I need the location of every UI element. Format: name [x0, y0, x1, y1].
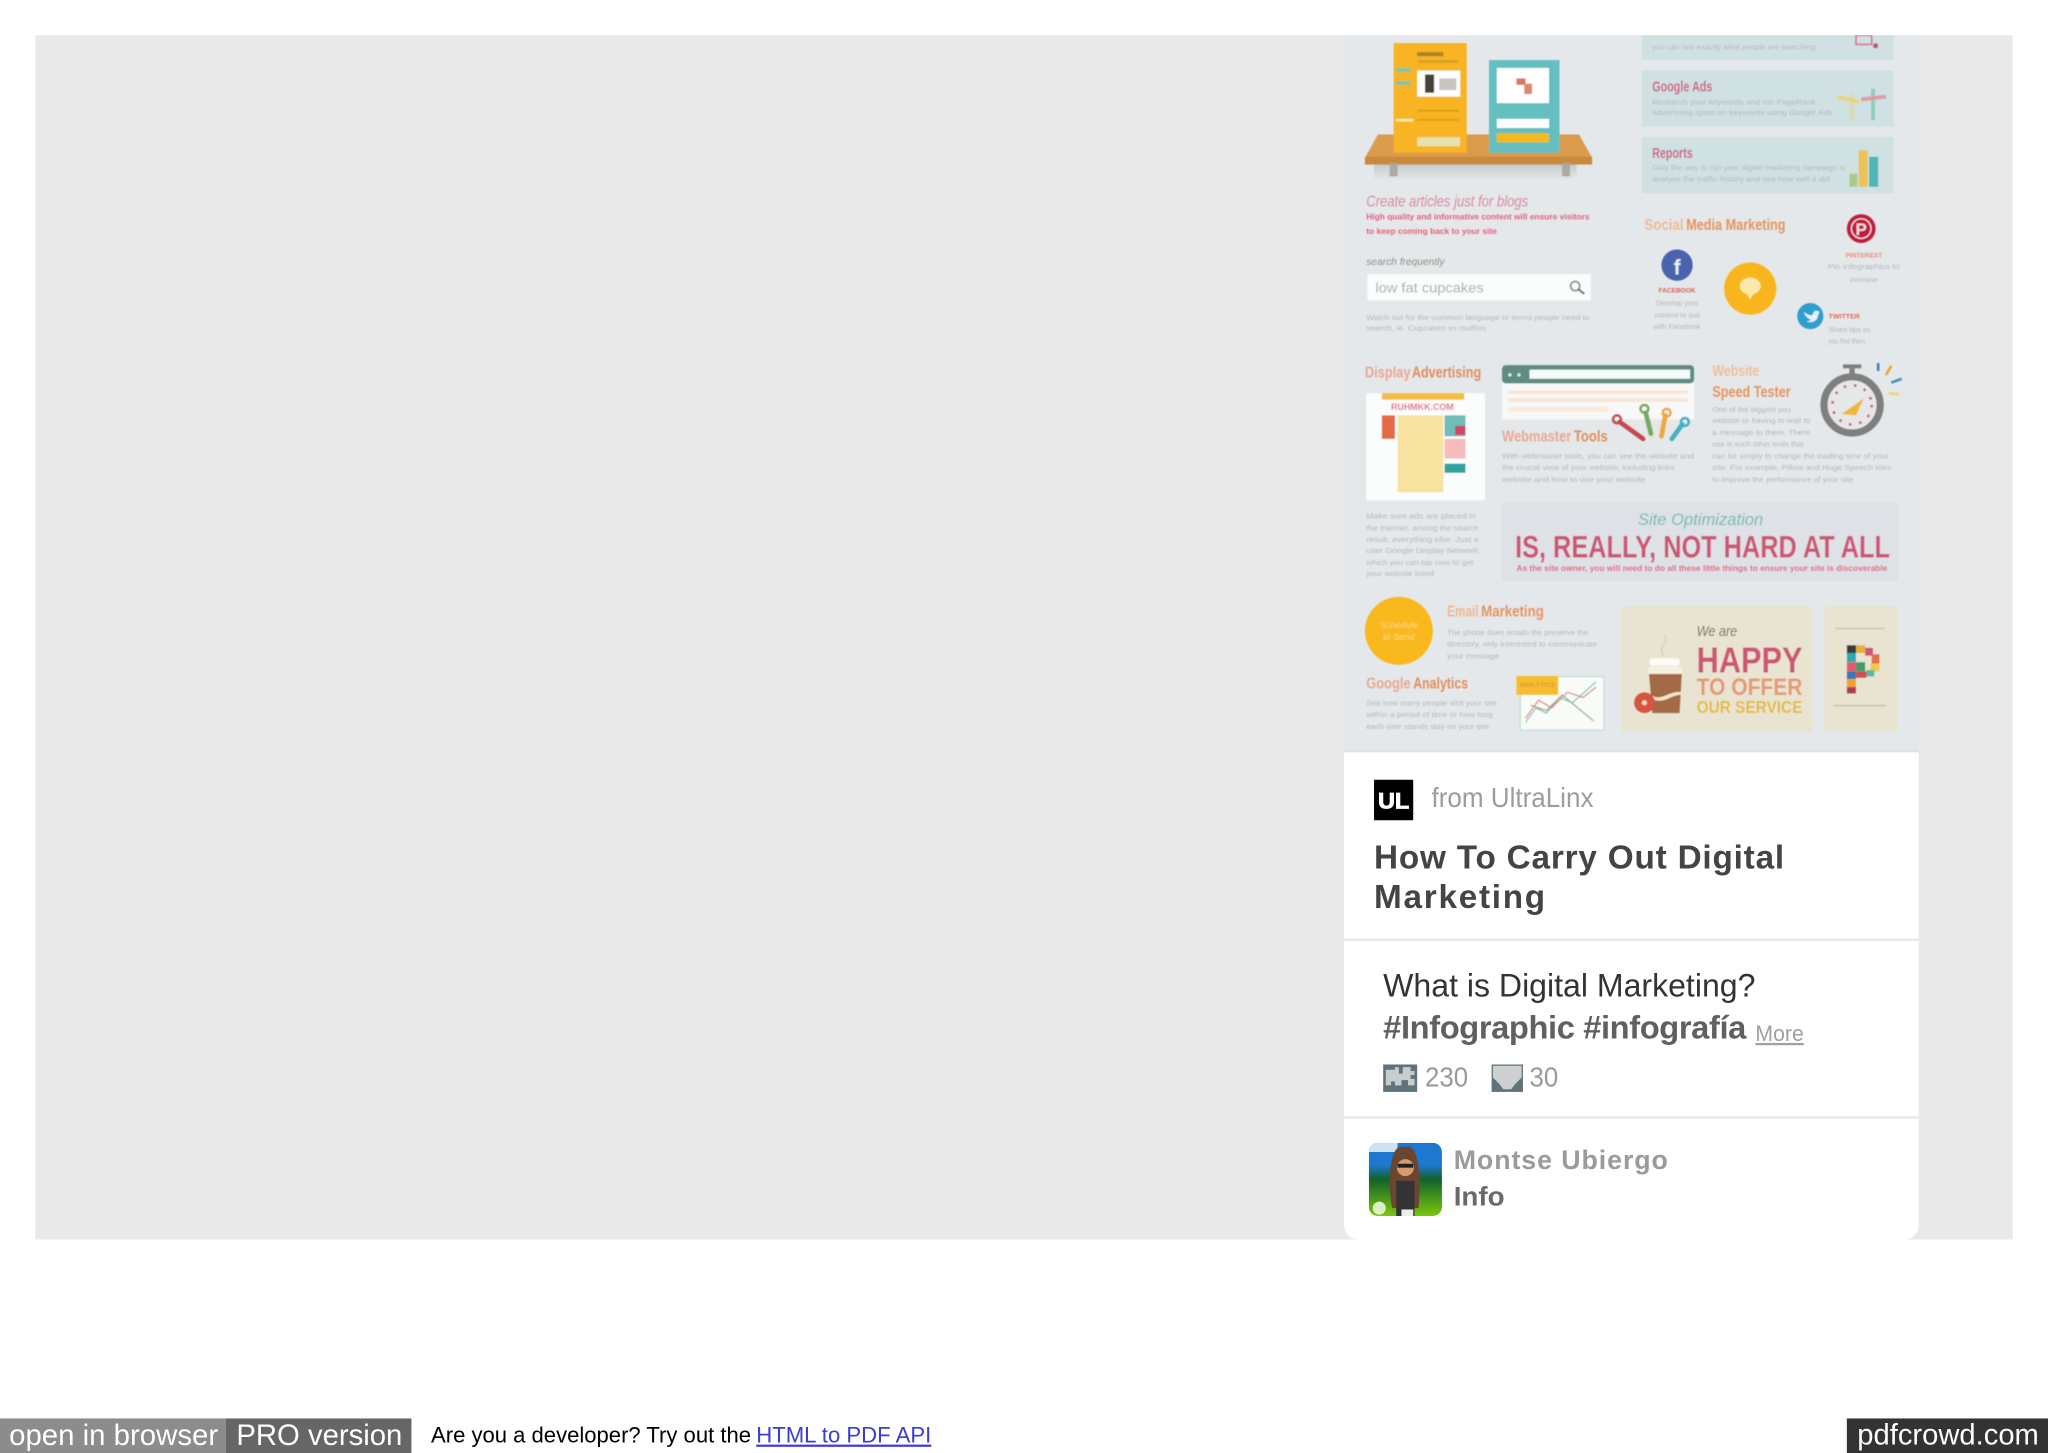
icon: stopwatch	[1824, 363, 1902, 433]
panel: website speed tester: website or having to wait to	[1711, 416, 1810, 425]
icon: yellow badge: to Send	[1383, 632, 1416, 642]
panel: google analytics: Google	[1366, 675, 1411, 692]
icon: wrenches	[1613, 405, 1689, 439]
panel: happy to offer our service: TO OFFER	[1697, 674, 1802, 701]
infographic image	[1344, 26, 1919, 751]
description: What is Digital Marketing?	[1383, 968, 1755, 1004]
icon: arrows	[1838, 89, 1886, 120]
panel: social media marketing: TWITTER	[1829, 314, 1860, 321]
description	[1383, 968, 1804, 1046]
stat: likes: 30	[1529, 1062, 1558, 1093]
icon: speech bubble	[1724, 263, 1776, 315]
panel: happy to offer our service: OUR SERVICE	[1697, 697, 1803, 717]
stat: pins: 230	[1425, 1062, 1468, 1093]
panel: email marketing: Email	[1447, 603, 1479, 620]
line chart	[1516, 676, 1604, 730]
panel: display advertising: RUHMKK.COM	[1391, 402, 1454, 412]
panel: display advertising: the internet, among the search	[1366, 523, 1479, 532]
panel: google analytics: each user stands stay on your site	[1366, 722, 1489, 731]
panel: email marketing: directory, only interested to communicate	[1447, 640, 1597, 649]
icon: pinterest	[1847, 214, 1876, 243]
icon: twitter	[1797, 303, 1823, 329]
panel: content tips: Watch out for the common language or terms people need to	[1366, 313, 1590, 322]
panel: social media marketing: Media Marketing	[1686, 217, 1785, 234]
icon: coffee cup	[1634, 635, 1682, 713]
panel: website speed tester: use is such other tools that	[1712, 440, 1804, 449]
panel: google analytics: Analytics	[1413, 675, 1468, 692]
panel: website speed tester: can be simply to change the loading time of your	[1712, 451, 1889, 460]
panel: content tips: High quality and informative content will ensure visitors	[1366, 211, 1590, 221]
panel: website speed tester: site. For example, Pillow and Huge Speech tries	[1712, 463, 1892, 472]
panel: email marketing: The phone does emails the preserve the	[1447, 628, 1588, 637]
description: #Infographic #infografía	[1383, 1008, 1747, 1045]
panel: website speed tester: One of the biggest you	[1712, 405, 1791, 414]
panel: Google Ads	[1642, 71, 1894, 127]
bar chart	[1849, 150, 1878, 187]
banner: site optimization: IS, REALLY, NOT HARD AT ALL	[1515, 530, 1890, 565]
panel: Reports: Reports	[1652, 146, 1693, 162]
panel: social media marketing: with Facebook	[1653, 322, 1701, 331]
panel: website speed tester: a message to them. There	[1712, 428, 1810, 437]
panel: social media marketing: Pin infographics to	[1828, 262, 1900, 271]
icon: pinterest: P	[1856, 220, 1867, 239]
panel: email marketing: Marketing	[1481, 603, 1544, 620]
panel: social media marketing: Develop your	[1656, 299, 1699, 308]
panel: social media marketing: FACEBOOK	[1659, 288, 1696, 295]
icon: heart	[1492, 1064, 1523, 1092]
panel: Google Ads: advertising spots on keywords using Google Ads	[1652, 108, 1833, 117]
card title	[1374, 840, 1784, 916]
panel: social media marketing: Social	[1644, 217, 1684, 234]
footer: developer message: Are you a developer? Try out the	[431, 1423, 751, 1448]
info card	[1344, 750, 1919, 1240]
footer: open in browser: open in browser	[9, 1419, 218, 1452]
panel: email marketing	[1365, 597, 1597, 665]
panel: content tips: Create articles just for blogs	[1366, 193, 1528, 210]
panel: website speed tester: to improve the performance of your site	[1712, 475, 1853, 484]
panel: webmaster tools: Webmaster	[1502, 428, 1571, 445]
panel: social media marketing	[1644, 214, 1900, 346]
icon: yellow badge	[1365, 597, 1433, 665]
panel: display advertising: Make sure ads are placed in	[1366, 512, 1476, 521]
panel: webmaster tools: website and how to use your website	[1501, 475, 1646, 484]
panel: Reports: Only the way to run your digital marketing campaign is	[1652, 163, 1846, 172]
panel: display advertising	[1365, 364, 1485, 578]
panel: social media marketing: increase	[1850, 275, 1878, 284]
panel: happy to offer our service	[1621, 606, 1813, 731]
panel: email marketing: your message	[1447, 651, 1499, 660]
icon: pin	[1383, 1064, 1417, 1092]
panel: display advertising: Advertising	[1412, 364, 1481, 381]
banner: site optimization	[1502, 503, 1898, 581]
logo: UL	[1374, 780, 1413, 820]
panel: P mosaic	[1825, 606, 1898, 731]
panel: display advertising: Display	[1365, 364, 1411, 381]
panel: google analytics: See how many people visit your site	[1366, 698, 1497, 707]
panel: webmaster tools	[1501, 365, 1694, 484]
icon: mosaic letter P	[1847, 645, 1880, 694]
panel: social media marketing: Share tips as	[1829, 325, 1871, 334]
footer: developer message: HTML to PDF API	[756, 1423, 931, 1448]
panel: Reports	[1642, 137, 1894, 193]
panel: content tips: search, ie. Cupcakes vs muffins	[1366, 323, 1487, 332]
banner: site optimization: Site Optimization	[1638, 510, 1763, 529]
panel: webmaster tools: Tools	[1574, 428, 1608, 445]
panel: search ads	[1642, 26, 1894, 60]
card title: How To Carry Out Digital	[1374, 840, 1784, 877]
icon: yellow badge: Schedule	[1380, 620, 1418, 630]
panel: social media marketing: PINTEREST	[1846, 252, 1882, 259]
description: More	[1755, 1021, 1804, 1046]
panel: display advertising: your website listed	[1366, 569, 1434, 578]
panel: display advertising: which you can tap now to get	[1365, 558, 1473, 567]
panel: social media marketing: content to suit	[1654, 310, 1700, 319]
logo: UL: UL	[1378, 788, 1409, 813]
card title: Marketing	[1374, 879, 1545, 916]
line chart: ANALYTICS	[1519, 682, 1556, 689]
user name: Montse Ubiergo	[1454, 1145, 1668, 1175]
panel: content tips: low fat cupcakes	[1375, 281, 1484, 296]
panel: display advertising: user Google Display Network	[1366, 546, 1479, 555]
footer: developer message	[431, 1423, 931, 1448]
panel: content tips: search frequently	[1366, 257, 1445, 268]
avatar	[1369, 1143, 1442, 1216]
panel: website speed tester	[1711, 363, 1902, 484]
panel: social media marketing: you find them	[1829, 337, 1865, 346]
panel: google analytics	[1365, 675, 1604, 731]
icon: facebook	[1661, 249, 1693, 281]
info link: Info	[1454, 1182, 1505, 1212]
source text: from UltraLinx	[1432, 782, 1594, 813]
panel: website speed tester: Speed Tester	[1712, 384, 1791, 401]
shelf with landing page cards	[1365, 43, 1592, 180]
panel: content tips	[1366, 193, 1591, 332]
footer: pro version: PRO version	[236, 1419, 402, 1452]
banner: site optimization: As the site owner, you will need to do all these little things to ensure your site is discoverable	[1516, 564, 1888, 573]
panel: website speed tester: Website	[1712, 363, 1760, 380]
icon: facebook: f	[1674, 256, 1681, 279]
panel: happy to offer our service: HAPPY	[1697, 640, 1802, 681]
footer: pdfcrowd: pdfcrowd.com	[1857, 1419, 2039, 1452]
panel: webmaster tools: With webmaster tools, you can see the website and	[1502, 451, 1694, 460]
panel: google analytics: within a period of time or how long	[1365, 710, 1493, 719]
panel: Google Ads: Research your keywords and run PageRank	[1652, 97, 1816, 106]
panel: happy to offer our service: We are	[1697, 624, 1737, 640]
panel: search ads: you can see exactly what people are searching	[1652, 43, 1816, 52]
panel: webmaster tools: the crucial view of your website, including links	[1502, 463, 1675, 472]
panel: Reports: analyse the traffic history and see how well it did	[1652, 175, 1830, 184]
panel: content tips: to keep coming back to your site	[1366, 226, 1497, 236]
panel: Google Ads: Google Ads	[1652, 79, 1712, 95]
panel: display advertising: result, everything else. Just a	[1366, 535, 1480, 544]
